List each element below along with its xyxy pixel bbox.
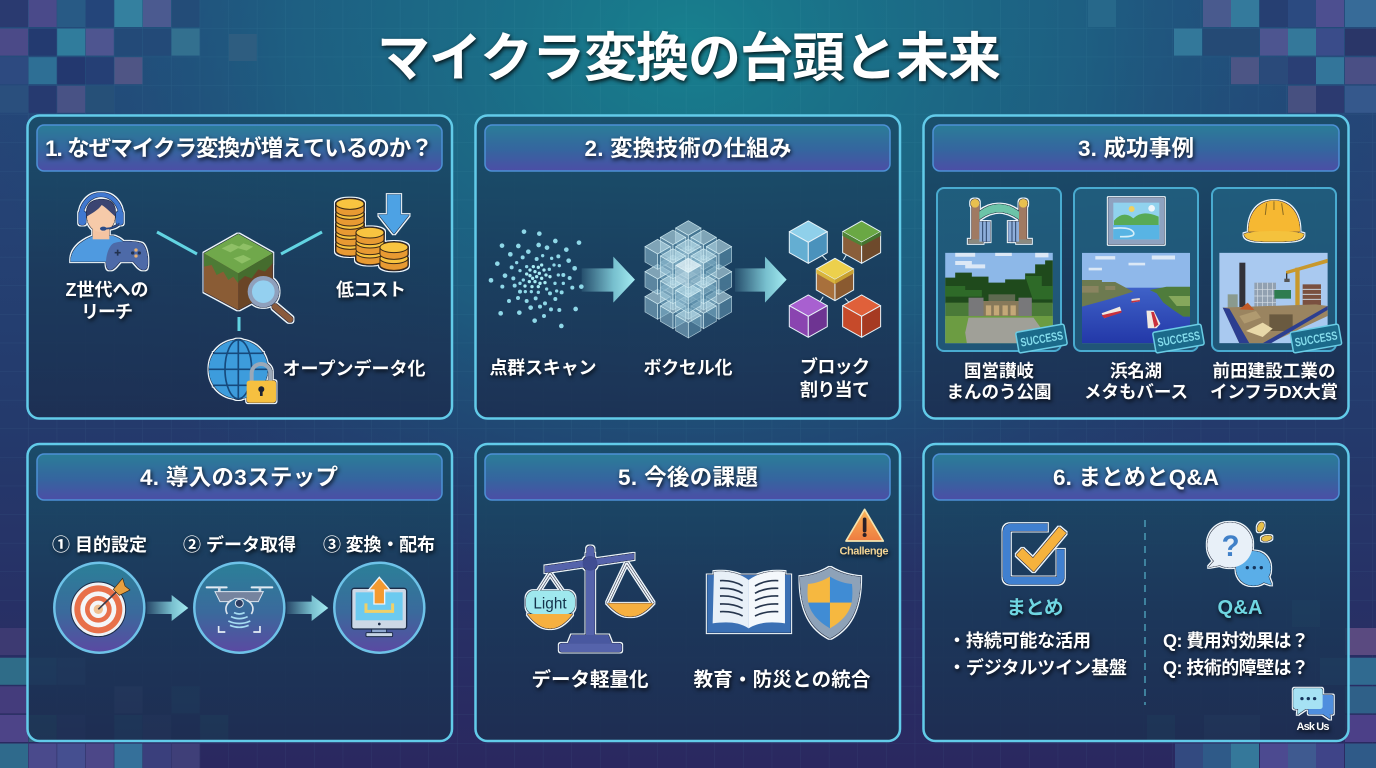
questions	[1163, 631, 1309, 678]
label: low cost: 低コスト	[336, 280, 406, 300]
questions: Q: 技術的障壁は？	[1163, 657, 1309, 678]
icon: warning triangle	[846, 509, 883, 541]
label: ask us: Ask Us	[1296, 721, 1330, 733]
label: Lake Hamana metaverse	[1084, 361, 1188, 402]
heading: panel 2: 2. 変換技術の仕組み	[584, 136, 792, 161]
label: Gen Z reach: リーチ	[81, 302, 133, 322]
arrow: point cloud to voxels	[582, 257, 635, 303]
stamp: success	[1153, 324, 1204, 353]
heading: panel 3: 3. 成功事例	[1078, 136, 1194, 161]
icon: shield	[800, 567, 861, 638]
arrow: voxels to blocks	[735, 257, 787, 303]
panel: 1. why conversions are increasing	[28, 116, 452, 418]
heading: panel 6: 6. まとめとQ&A	[1053, 465, 1219, 490]
icon: monitor upload	[334, 563, 424, 653]
label: open data: オープンデータ化	[282, 358, 426, 379]
heading: panel 4	[37, 454, 442, 500]
questions: Q: 費用対効果は？	[1163, 631, 1309, 651]
heading: panel 1: 1. なぜマイクラ変換が増えているのか？	[45, 135, 433, 161]
icon: target	[54, 563, 144, 653]
label: Gen Z reach: Z世代への	[66, 280, 148, 300]
label: Maeda Corporation award: 前田建設工業の	[1212, 361, 1336, 381]
label: Maeda Corporation award	[1210, 361, 1338, 402]
icon: globe with padlock	[209, 340, 276, 403]
stamp: success: SUCCESS	[1156, 328, 1201, 350]
heading: panel 5	[485, 454, 890, 500]
label: data reduction: データ軽量化	[532, 668, 649, 691]
icon: gamer with controller	[71, 195, 148, 270]
label: point cloud scan: 点群スキャン	[490, 358, 596, 378]
label: challenge: Challenge	[840, 546, 888, 558]
icon: ask us bubbles	[1293, 688, 1333, 719]
heading: panel 5: 5. 今後の課題	[618, 465, 758, 490]
icon: grass block with magnifier	[204, 234, 290, 319]
icon: balance scale: Light	[533, 596, 567, 613]
step 3 label: ③ 変換・配布	[323, 535, 435, 555]
label: summary: まとめ	[1006, 597, 1064, 619]
label: block assignment	[800, 356, 870, 400]
picture: construction site Minecraft scene	[1219, 252, 1328, 344]
label: block assignment: ブロック	[800, 356, 870, 377]
panel: 6. summary and Q&A	[924, 444, 1348, 741]
card: Sanuki park	[937, 188, 1067, 353]
card: Lake Hamana	[1074, 188, 1204, 353]
arrow: step 1 to 2	[147, 595, 188, 621]
stamp: success: SUCCESS	[1019, 328, 1064, 350]
step 2 label: ② データ取得	[183, 534, 296, 555]
heading: panel 6	[933, 454, 1339, 500]
label: Lake Hamana metaverse: 浜名湖	[1110, 361, 1162, 381]
summary bullets	[948, 630, 1127, 678]
icon: open book	[707, 571, 791, 633]
divider	[1144, 520, 1146, 705]
label: Lake Hamana metaverse: メタもバース	[1084, 382, 1188, 402]
icon: point cloud	[489, 229, 584, 328]
stamp: success	[1290, 324, 1342, 353]
label: voxelization: ボクセル化	[644, 358, 732, 378]
picture: Lake Hamana Minecraft scene	[1082, 252, 1190, 344]
label: Maeda Corporation award: インフラDX大賞	[1210, 382, 1338, 402]
icon: coins with down arrow	[336, 195, 409, 270]
heading: panel 3	[933, 125, 1339, 171]
icon: park gate	[968, 199, 1031, 243]
panel: 5. future challenges	[476, 444, 900, 741]
step 1 label: ① 目的設定	[52, 535, 147, 555]
card: Maeda Corporation	[1212, 188, 1342, 353]
panel: 2. how the conversion works	[476, 116, 900, 418]
icon: question bubbles	[1207, 521, 1272, 586]
stamp: success: SUCCESS	[1294, 328, 1338, 350]
label: Sanuki park: まんのう公園	[946, 382, 1052, 402]
label: Sanuki park	[946, 361, 1052, 402]
arrow: step 2 to 3	[287, 595, 328, 621]
panel: 4. three steps	[28, 444, 452, 741]
label: Gen Z reach	[66, 280, 148, 322]
icon: framed landscape	[1108, 198, 1164, 244]
title: マイクラ変換の台頭と未来	[377, 29, 1001, 88]
stamp: success	[1016, 324, 1067, 353]
icon: hard hat	[1244, 201, 1304, 242]
summary bullets: ・持続可能な活用	[948, 630, 1091, 651]
label: Sanuki park: 国営讃岐	[964, 361, 1034, 381]
summary bullets: ・デジタルツイン基盤	[948, 657, 1127, 678]
label: Q&A: Q&A	[1218, 597, 1262, 619]
label: education and disaster prevention: 教育・防災との統合	[694, 669, 871, 691]
icon: drone scanning	[194, 563, 284, 653]
icon: balance scale	[526, 546, 653, 652]
icon: checkbox	[1007, 527, 1063, 581]
heading: panel 1	[37, 125, 442, 171]
picture: Sanuki park Minecraft scene	[945, 252, 1053, 344]
panel: 3. success stories	[924, 116, 1348, 418]
label: block assignment: 割り当て	[800, 380, 870, 400]
icon: voxel cube	[645, 221, 732, 338]
icon: coloured blocks	[789, 221, 881, 337]
connector lines	[157, 232, 322, 331]
heading: panel 2	[485, 125, 890, 171]
icon: question bubbles: ?	[1222, 530, 1240, 563]
heading: panel 4: 4. 導入の3ステップ	[140, 465, 338, 490]
